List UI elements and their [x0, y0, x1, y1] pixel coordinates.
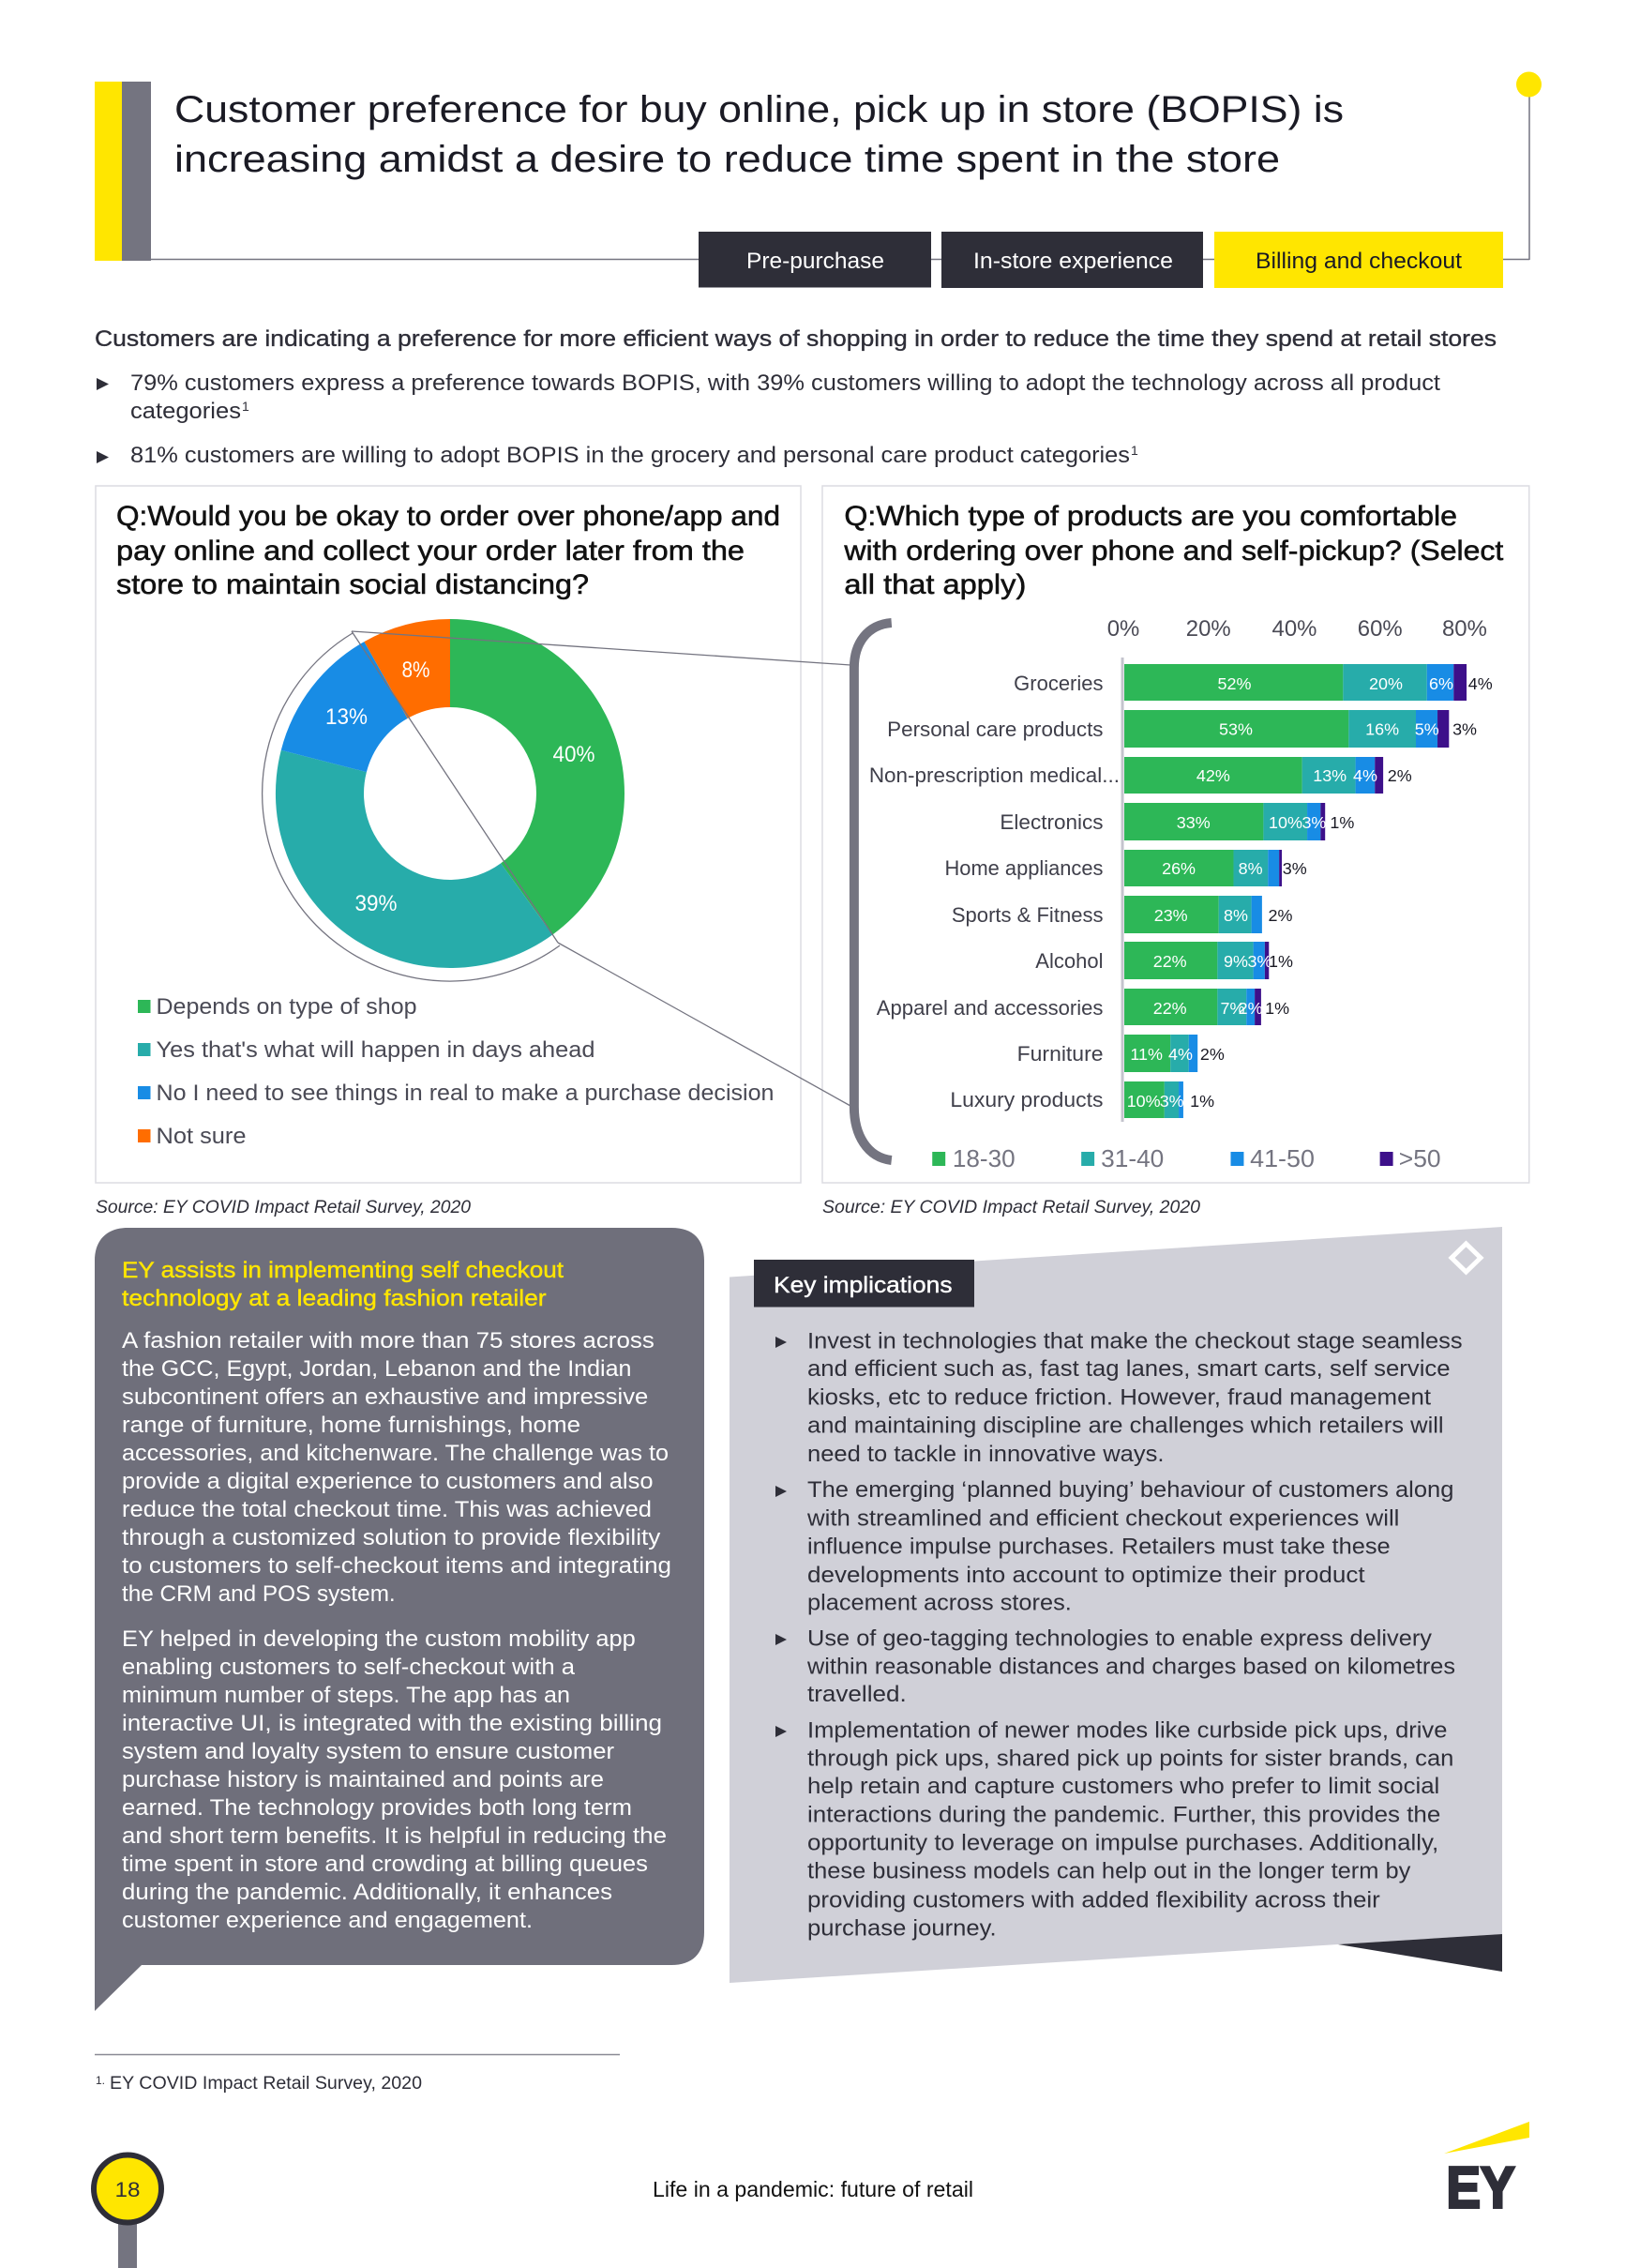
callout heading: EY assists in implementing self checkout: [122, 1258, 564, 1283]
callout paragraph 2: purchase history is maintained and points are: [122, 1767, 604, 1792]
callout paragraph 1: [122, 1328, 671, 1607]
bars: Luxury products: [1124, 1081, 1214, 1118]
bars: Apparel and accessories: 2%: [1239, 999, 1263, 1018]
callout paragraph 1: subcontinent offers an exhaustive and impressive: [122, 1384, 648, 1410]
implication 3: travelled.: [807, 1682, 907, 1707]
implication 4: help retain and capture customers who prefer to limit social: [807, 1774, 1439, 1799]
panel: key implications: [730, 1227, 1502, 1983]
page number marker: 18: [114, 2178, 141, 2201]
tab: Billing and checkout: Billing and checkout: [1256, 249, 1462, 274]
intro text block: 81% customers are willing to adopt BOPIS in the grocery and personal care product categories: [130, 443, 1130, 468]
bars: Groceries: 20%: [1369, 674, 1403, 693]
donut legend: Not sure: [156, 1124, 246, 1149]
bars: Apparel and accessories: 1%: [1265, 999, 1289, 1018]
implication 4: providing customers with added flexibility across their: [807, 1888, 1380, 1913]
donut heading: [116, 501, 780, 600]
tab: Billing and checkout: [1214, 232, 1503, 288]
key implications heading: Key implications: [774, 1273, 953, 1298]
implication 1: need to tackle in innovative ways.: [807, 1442, 1165, 1467]
donut legend: No I need to see things in real to make a purchase decision: [156, 1081, 775, 1106]
callout paragraph 2: enabling customers to self-checkout with a: [122, 1655, 575, 1680]
callout paragraph 1: to customers to self-checkout items and integrating: [122, 1553, 671, 1579]
intro text block: [95, 326, 1497, 468]
callout paragraph 2: customer experience and engagement.: [122, 1908, 533, 1933]
title: increasing amidst a desire to reduce time spent in the store: [174, 139, 1280, 180]
bars: Home appliances: [1124, 850, 1307, 886]
implication 4: [775, 1718, 1453, 1941]
donut legend: Depends on type of shop: [156, 994, 416, 1020]
callout paragraph 2: minimum number of steps. The app has an: [122, 1683, 570, 1708]
donut chart: 40%: [553, 742, 594, 767]
bars: Luxury products: 1%: [1190, 1092, 1214, 1111]
implication 2: influence impulse purchases. Retailers must take these: [807, 1534, 1391, 1559]
intro text block: Customers are indicating a preference for more efficient ways of shopping in order to reduce the time they spend at retail stores: [95, 326, 1497, 352]
bars: Non-prescription medical: 4%: [1353, 766, 1377, 785]
bar chart category labels: Sports & Fitness: [952, 903, 1103, 927]
implication 2: placement across stores.: [807, 1591, 1072, 1616]
callout paragraph 2: [122, 1626, 667, 1933]
yellow accent bar: [95, 82, 122, 261]
implication 4: Implementation of newer modes like curbside pick ups, drive: [807, 1718, 1447, 1744]
callout paragraph 1: through a customized solution to provide flexibility: [122, 1525, 661, 1550]
implication 4: these business models can help out in the longer term by: [807, 1859, 1411, 1884]
bars: Groceries: [1124, 664, 1493, 701]
callout heading: [122, 1258, 564, 1311]
bar chart category labels: Alcohol: [1035, 949, 1103, 973]
implication 1: kiosks, etc to reduce friction. However, fraud management: [807, 1385, 1431, 1411]
bars: Home appliances: 26%: [1162, 859, 1196, 878]
bars: Furniture: 4%: [1168, 1045, 1193, 1064]
bar chart category labels: [869, 672, 1120, 1111]
bars: Personal care products: [1124, 710, 1477, 748]
bars: Electronics: 10%: [1269, 813, 1302, 832]
bar chart axis labels: 40%: [1272, 616, 1317, 642]
callout paragraph 1: accessories, and kitchenware. The challenge was to: [122, 1441, 669, 1466]
bars: Apparel and accessories: [1124, 989, 1289, 1025]
bars: Personal care products: 5%: [1415, 719, 1439, 739]
bars: Personal care products: 53%: [1219, 719, 1253, 739]
bars: Alcohol: 3%: [1248, 952, 1271, 971]
bars: Non-prescription medical: [1124, 757, 1412, 794]
bars: Furniture: [1124, 1035, 1225, 1072]
implication 3: [775, 1626, 1455, 1707]
callout paragraph 1: the CRM and POS system.: [122, 1581, 396, 1607]
bars: Personal care products: 3%: [1452, 719, 1477, 739]
dark corner triangle: [1338, 1934, 1502, 1972]
bars: Groceries: 52%: [1218, 674, 1251, 693]
bars: Groceries: 6%: [1429, 674, 1453, 693]
implication 2: developments into account to optimize their product: [807, 1563, 1365, 1588]
footer title: Life in a pandemic: future of retail: [653, 2177, 973, 2201]
implication 1: and maintaining discipline are challenges which retailers will: [807, 1413, 1444, 1438]
bars: Electronics: 33%: [1177, 813, 1211, 832]
page number marker: [94, 2155, 161, 2268]
callout paragraph 2: during the pandemic. Additionally, it enhances: [122, 1880, 612, 1905]
donut chart: 8%: [401, 658, 429, 683]
bar chart heading: all that apply): [844, 569, 1026, 600]
bar chart heading: with ordering over phone and self-pickup? (Select: [843, 536, 1504, 567]
callout paragraph 2: earned. The technology provides both long term: [122, 1795, 632, 1821]
callout paragraph 1: reduce the total checkout time. This was achieved: [122, 1497, 652, 1522]
implication 1: Invest in technologies that make the checkout stage seamless: [807, 1328, 1463, 1353]
bar chart category labels: Groceries: [1014, 672, 1103, 695]
intro text block: 1: [242, 399, 249, 414]
bars: Home appliances: 8%: [1239, 859, 1263, 878]
bar chart category labels: Apparel and accessories: [877, 996, 1103, 1020]
callout paragraph 2: interactive UI, is integrated with the existing billing: [122, 1711, 662, 1736]
bar chart legend: 18-30: [953, 1144, 1016, 1172]
panel: EY case study callout: [95, 1228, 704, 2011]
bars: Personal care products: 16%: [1365, 719, 1399, 739]
implication 3: Use of geo-tagging technologies to enable express delivery: [807, 1626, 1433, 1651]
footnote: [95, 2054, 620, 2094]
callout paragraph 1: the GCC, Egypt, Jordan, Lebanon and the Indian: [122, 1356, 632, 1382]
bars: Luxury products: 10%: [1127, 1092, 1161, 1111]
bars: Groceries: 4%: [1468, 674, 1493, 693]
bars: Sports and Fitness: 23%: [1154, 906, 1188, 925]
callout heading: technology at a leading fashion retailer: [122, 1286, 547, 1311]
bars: Apparel and accessories: 7%: [1221, 999, 1244, 1018]
implication 2: with streamlined and efficient checkout experiences will: [806, 1506, 1399, 1532]
footnote: 1.: [96, 2074, 105, 2087]
implication 2: The emerging ‘planned buying’ behaviour of customers along: [807, 1477, 1453, 1503]
bar chart axis labels: [1107, 616, 1487, 1122]
bars: Non-prescription medical: 42%: [1196, 766, 1230, 785]
bars: Non-prescription medical: 2%: [1388, 766, 1412, 785]
bar chart axis labels: 60%: [1358, 616, 1403, 642]
panel: bar chart question: [822, 486, 1529, 1183]
intro text block: 79% customers express a preference towards BOPIS, with 39% customers willing to adopt the technology across all product: [130, 370, 1440, 396]
zoom connector lines from donut to bar chart: [263, 631, 850, 1106]
donut chart: 13%: [325, 704, 368, 730]
yellow dot: [1516, 71, 1542, 98]
bars: Sports and Fitness: 8%: [1224, 906, 1248, 925]
callout paragraph 2: and short term benefits. It is helpful in reducing the: [122, 1823, 667, 1849]
bars: Alcohol: [1124, 942, 1293, 979]
bar chart legend: [932, 1144, 1441, 1172]
bracket: [854, 623, 892, 1160]
intro text block: 1: [1131, 443, 1138, 458]
bar chart category labels: Electronics: [1000, 810, 1103, 834]
donut heading: pay online and collect your order later from the: [116, 536, 745, 567]
donut legend: Yes that's what will happen in days ahead: [156, 1037, 594, 1063]
donut heading: store to maintain social distancing?: [116, 569, 589, 600]
bars: Home appliances: 3%: [1283, 859, 1307, 878]
bar chart category labels: Home appliances: [944, 856, 1103, 880]
bar chart heading: Q:Which type of products are you comfortable: [844, 501, 1457, 532]
callout paragraph 1: A fashion retailer with more than 75 stores across: [122, 1328, 655, 1353]
callout paragraph 1: provide a digital experience to customers and also: [122, 1469, 653, 1494]
bars: Alcohol: 1%: [1269, 952, 1293, 971]
panel: donut question: [96, 486, 801, 1183]
bars: Luxury products: 3%: [1160, 1092, 1184, 1111]
donut legend: [138, 994, 775, 1149]
bars: Alcohol: 9%: [1224, 952, 1248, 971]
implication 4: interactions during the pandemic. Further, this provides the: [807, 1803, 1440, 1828]
implication 1: and efficient such as, fast tag lanes, smart carts, self service: [807, 1356, 1451, 1382]
tab: Pre-purchase: Pre-purchase: [746, 249, 884, 274]
footnote: EY COVID Impact Retail Survey, 2020: [110, 2074, 422, 2094]
icon: white diamond: [1452, 1244, 1481, 1272]
bars: Electronics: [1124, 803, 1354, 840]
header frame with accent bars and tabs: [95, 71, 1542, 288]
implication 3: within reasonable distances and charges based on kilometres: [806, 1654, 1455, 1679]
callout paragraph 1: range of furniture, home furnishings, home: [122, 1413, 580, 1438]
bar chart category labels: Luxury products: [950, 1088, 1103, 1111]
grey accent bar: [122, 82, 151, 261]
implication 4: purchase journey.: [807, 1915, 997, 1941]
bar chart heading: [843, 501, 1504, 600]
bar chart category labels: Non-prescription medical...: [869, 764, 1120, 787]
bars: Non-prescription medical: 13%: [1313, 766, 1347, 785]
bars: Sports and Fitness: 2%: [1269, 906, 1293, 925]
tab: In-store experience: In-store experience: [973, 249, 1173, 274]
callout paragraph 2: EY helped in developing the custom mobility app: [122, 1626, 636, 1652]
EY logo: [1444, 2122, 1529, 2221]
bars: Apparel and accessories: 22%: [1153, 999, 1187, 1018]
title: Customer preference for buy online, pick up in store (BOPIS) is: [174, 89, 1344, 130]
implication 4: opportunity to leverage on impulse purchases. Additionally,: [807, 1830, 1438, 1855]
bars: Furniture: 11%: [1130, 1045, 1163, 1064]
callout paragraph 2: time spent in store and crowding at billing queues: [122, 1852, 648, 1877]
source: bar chart: Source: EY COVID Impact Retail Survey, 2020: [822, 1198, 1200, 1217]
implication 1: [775, 1328, 1463, 1467]
title: [174, 89, 1344, 180]
bar chart axis labels: 80%: [1442, 616, 1487, 642]
callout paragraph 2: system and loyalty system to ensure customer: [122, 1739, 614, 1764]
bar chart axis labels: 20%: [1186, 616, 1231, 642]
bar chart axis labels: 0%: [1107, 616, 1139, 642]
bars: Sports and Fitness: [1124, 896, 1293, 933]
bars: Furniture: 2%: [1200, 1045, 1225, 1064]
EY logo: EY: [1446, 2155, 1515, 2221]
implication 4: through pick ups, shared pick up points for sister brands, can: [807, 1746, 1453, 1771]
tab: Pre-purchase: [699, 232, 931, 287]
implication 2: [775, 1477, 1453, 1616]
intro text block: categories: [130, 399, 241, 424]
bar chart legend: 31-40: [1101, 1144, 1164, 1172]
key implications heading: [754, 1260, 974, 1308]
donut heading: Q:Would you be okay to order over phone/app and: [116, 501, 780, 532]
bar chart legend: 41-50: [1250, 1144, 1315, 1172]
donut chart: [276, 619, 624, 968]
bars: Alcohol: 22%: [1153, 952, 1187, 971]
bar chart category labels: Personal care products: [887, 718, 1103, 741]
bar chart category labels: Furniture: [1017, 1042, 1103, 1066]
bar chart legend: >50: [1399, 1144, 1441, 1172]
bars: Electronics: 1%: [1330, 813, 1354, 832]
source: donut: Source: EY COVID Impact Retail Survey, 2020: [96, 1198, 471, 1217]
tab: In-store experience: [941, 232, 1203, 288]
donut chart: 39%: [354, 891, 398, 916]
bars: Electronics: 3%: [1302, 813, 1326, 832]
